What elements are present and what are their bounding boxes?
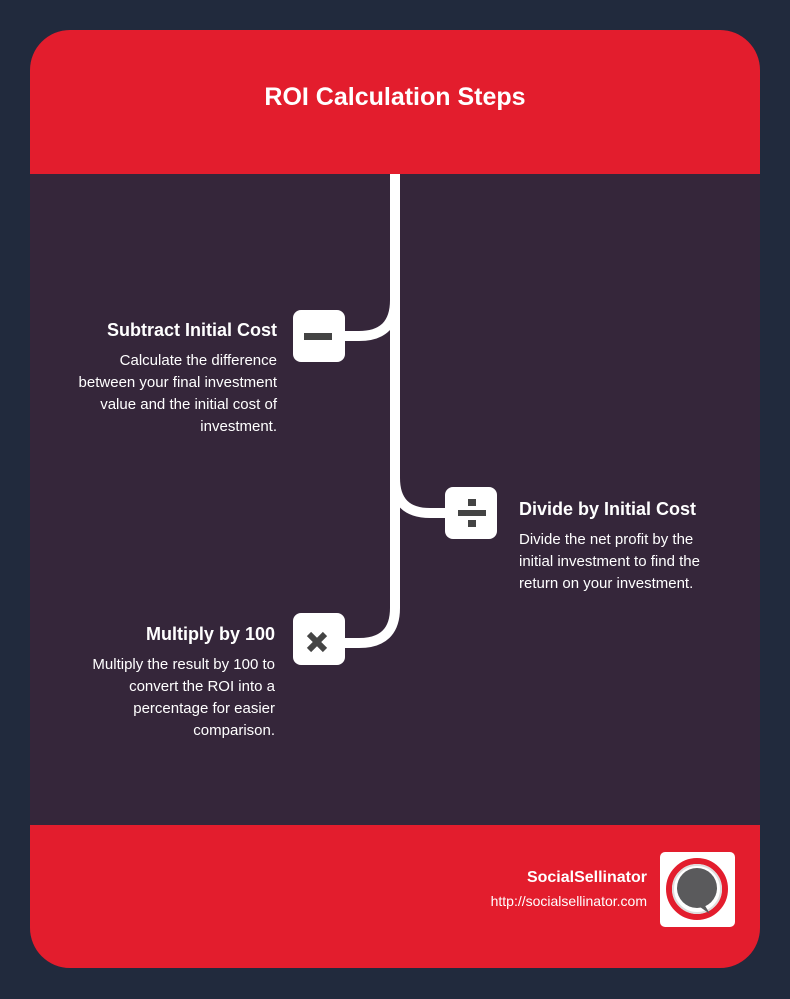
- icon: divide: [445, 487, 497, 539]
- step: subtract: between your final investment: [79, 374, 277, 391]
- step: divide: initial investment to find the: [519, 553, 700, 570]
- step: multiply: [92, 624, 275, 739]
- step: multiply: comparison.: [193, 722, 275, 739]
- step: subtract: value and the initial cost of: [100, 396, 277, 413]
- brand url: http://socialsellinator.com: [491, 893, 647, 909]
- step: divide: Divide the net profit by the: [519, 531, 693, 548]
- title: ROI Calculation Steps: [264, 83, 526, 111]
- step: multiply: Multiply the result by 100 to: [92, 656, 275, 673]
- header: [30, 30, 760, 174]
- step: subtract: investment.: [200, 418, 277, 435]
- brand name: SocialSellinator: [527, 869, 647, 886]
- footer: [30, 825, 760, 968]
- step: multiply: Multiply by 100: [146, 624, 275, 644]
- step: subtract: Calculate the difference: [120, 352, 277, 369]
- step: multiply: convert the ROI into a: [129, 678, 275, 695]
- icon: logo: [660, 852, 735, 927]
- icon: multiply: [293, 613, 345, 665]
- step: divide: Divide by Initial Cost: [519, 499, 696, 519]
- step: subtract: [79, 320, 278, 435]
- step: multiply: percentage for easier: [133, 700, 275, 717]
- step: divide: [519, 499, 700, 592]
- step: divide: return on your investment.: [519, 575, 693, 592]
- icon: minus: [293, 310, 345, 362]
- step: subtract: Subtract Initial Cost: [107, 320, 277, 340]
